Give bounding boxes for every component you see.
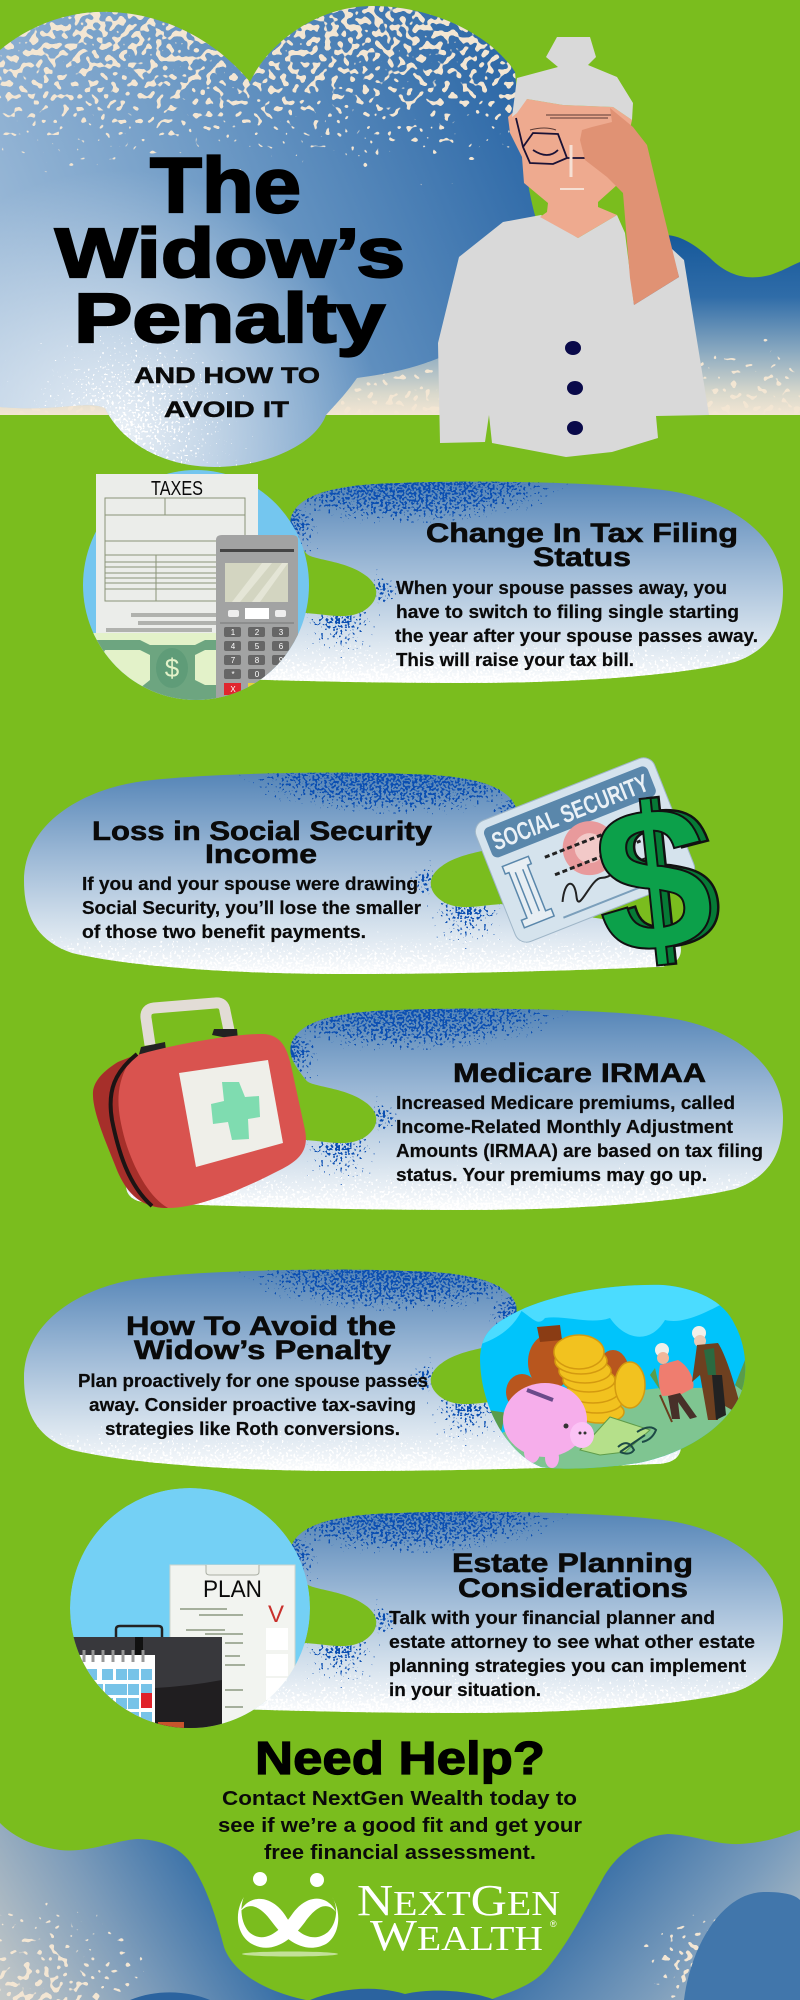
calculator: * [231,670,235,679]
heading: Estate Planning [452,1548,693,1578]
body text: Plan proactively for one spouse passes [78,1371,428,1391]
body text: have to switch to filing single starting [396,602,739,622]
heading: Change In Tax Filing [426,518,738,548]
blue to cream rear band [0,228,800,418]
icon: social security card: SOCIAL SECURITY [488,769,653,856]
panel: how to avoid the widow's penalty [17,1266,750,1475]
body text [389,1608,755,1700]
footer wave background [0,1820,800,2000]
footer dark lumps [130,1989,495,2000]
glasses and features [516,115,612,189]
heading: How To Avoid the [126,1311,396,1341]
icon: plan clipboard, briefcase and calendar [60,1488,310,1735]
calculator: 0 [255,670,260,679]
logo: nextgen wealth [238,1872,560,1960]
shirt [438,215,709,457]
calculator: 3 [279,628,284,637]
panel: estate planning considerations [60,1488,790,1735]
body text [396,1093,763,1185]
calculator: 6 [279,642,284,651]
body text: Increased Medicare premiums, called [396,1093,735,1113]
need help heading: Need Help? [255,1732,545,1784]
calculator: 9 [279,656,284,665]
body text: Social Security, you’ll lose the smaller [82,898,421,918]
body text: estate attorney to see what other estate [389,1632,755,1652]
heading [92,816,432,869]
calculator: X [230,685,236,694]
glasses [618,1427,656,1454]
calculator: 1 [231,628,236,637]
piggy bank [503,1383,594,1468]
heading: Considerations [458,1573,688,1603]
elderly man [692,1326,740,1420]
body text [82,874,421,942]
white label [179,1060,283,1167]
heading: Status [533,542,631,572]
briefcase [74,1624,222,1728]
coins [554,1335,645,1423]
title: Penalty [74,279,385,357]
face [508,99,632,238]
title: The [150,141,301,229]
body text: of those two benefit payments. [82,922,366,942]
heading: Loss in Social Security [92,816,432,846]
illustration: grieving widow [438,37,709,457]
illustration: retirement savings and elderly couple [478,1280,750,1475]
arm and hand [580,108,679,305]
title [55,141,405,357]
tax form: TAXES [151,478,203,500]
icon: tax form and calculator [80,470,309,705]
body text: in your situation. [389,1680,541,1700]
money [93,633,220,700]
tax form [96,474,258,634]
body text: Amounts (IRMAA) are based on tax filing [396,1141,763,1161]
plan clipboard: PLAN [203,1576,262,1603]
icon: first aid kit [93,1003,306,1208]
panel: loss in social security income [17,754,730,1000]
plan clipboard [170,1565,295,1735]
body text: Talk with your financial planner and [389,1608,715,1628]
subtitle: AVOID IT [164,397,290,422]
body text: Income-Related Monthly Adjustment [396,1117,733,1137]
money bags [528,1338,564,1386]
logo wordmark: ® [550,1919,557,1929]
logo wordmark [357,1876,560,1960]
panel: medicare irmaa [93,1003,790,1214]
calculator: 5 [255,642,260,651]
money: $ [165,653,180,683]
calculator: 4 [231,642,236,651]
heading: Income [205,839,317,869]
icon: green dollar sign: $ [585,760,722,1000]
subtitle: AND HOW TO [134,363,320,388]
call to action text: free financial assessment. [264,1842,536,1864]
heading [126,1311,396,1365]
plan clipboard: V [268,1601,284,1628]
calculator [216,535,298,705]
call to action text: Contact NextGen Wealth today to [222,1788,577,1810]
hero background shapes [0,0,800,470]
body text: away. Consider proactive tax-saving [89,1395,416,1415]
front cloud [0,0,560,470]
body text: status. Your premiums may go up. [396,1165,707,1185]
subtitle [134,363,320,422]
body text: This will raise your tax bill. [396,650,634,670]
panel: change in tax filing status [80,470,790,705]
handle [146,1003,230,1045]
logo wordmark: WEALTH [370,1911,543,1960]
elderly woman [655,1343,697,1422]
heading: Medicare IRMAA [453,1058,706,1088]
calendar [80,1650,155,1723]
icon: social security card [472,754,730,1000]
heading [452,1548,693,1603]
heading [426,518,738,572]
hair and bun [512,37,633,120]
logo mark [238,1872,338,1956]
body text: strategies like Roth conversions. [105,1419,400,1439]
calculator: 2 [255,628,260,637]
heading: Widow’s Penalty [134,1335,391,1365]
case body [93,1034,306,1208]
green cross [211,1082,260,1140]
body text: When your spouse passes away, you [396,578,727,598]
buttons [565,341,583,435]
logo wordmark: NEXTGEN [357,1876,560,1925]
body text [78,1371,428,1439]
call to action text: see if we’re a good fit and get your [218,1815,582,1837]
calculator: 8 [255,656,260,665]
body text: the year after your spouse passes away. [395,626,758,646]
body text: planning strategies you can implement [389,1656,746,1676]
body text [395,578,758,670]
calculator: 7 [231,656,236,665]
cash [580,1417,650,1455]
icon: green dollar sign: $ [592,759,730,999]
body text: If you and your spouse were drawing [82,874,418,894]
title: Widow’s [55,214,405,292]
call to action text [218,1788,582,1864]
